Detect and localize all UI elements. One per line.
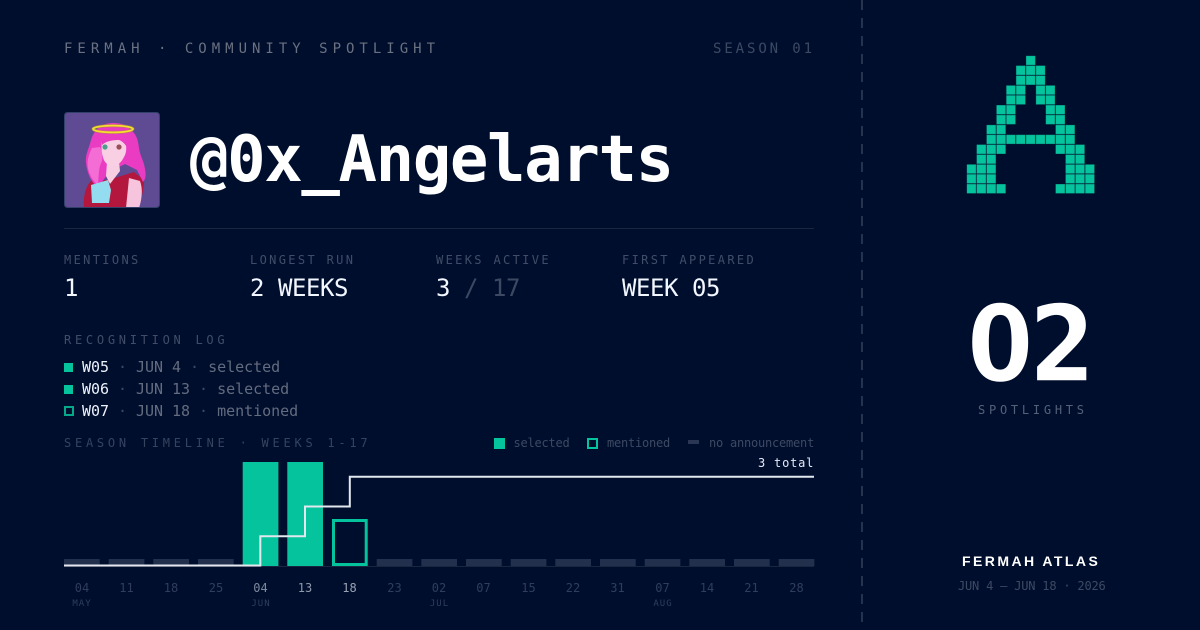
date axis labels: 18 (164, 581, 178, 595)
date axis labels: 25 (209, 581, 223, 595)
recognition log (64, 333, 298, 420)
log row W05: W05 · JUN 4 · selected (82, 358, 280, 376)
date axis labels: MAY (72, 599, 92, 609)
legend: selected (514, 436, 570, 450)
legend: no announcement (709, 436, 814, 450)
title: handle: @0x_Angelarts (190, 123, 673, 197)
log row W06: W06 · JUN 13 · selected (82, 380, 289, 398)
date axis labels: 28 (789, 581, 804, 595)
legend: mentioned (607, 436, 670, 450)
big number: spotlight count: 02 (967, 282, 1091, 406)
stat: weeks active: WEEKS ACTIVE (436, 253, 551, 267)
date axis labels: JUL (430, 599, 449, 609)
cumulative step line (64, 477, 814, 566)
date axis labels: 18 (342, 581, 357, 595)
header: community spotlight: FERMAH · COMMUNITY SPOTLIGHT (64, 41, 440, 57)
date axis labels: 14 (700, 581, 714, 595)
date axis labels: 04 (75, 581, 89, 595)
date axis labels: 04 (253, 581, 268, 595)
stat: longest run: LONGEST RUN (250, 253, 355, 267)
date axis labels (72, 581, 804, 609)
stat: weeks active: 3 / 17 (436, 274, 520, 302)
logo: pixel letter A (967, 56, 1094, 193)
date axis labels: 11 (119, 581, 134, 595)
spotlights caption: SPOTLIGHTS (978, 403, 1088, 417)
date axis labels: JUN (251, 599, 271, 609)
stat: weeks active (436, 253, 551, 302)
date axis labels: 22 (566, 581, 580, 595)
date axis labels: AUG (653, 599, 673, 609)
date axis labels: 07 (655, 581, 670, 595)
date axis labels: 31 (610, 581, 625, 595)
stat: first appeared: WEEK 05 (622, 274, 720, 302)
date axis labels: 21 (744, 581, 759, 595)
stat: first appeared: FIRST APPEARED (622, 253, 756, 267)
stat: longest run: 2 WEEKS (250, 274, 348, 302)
timeline heading: SEASON TIMELINE · WEEKS 1-17 (64, 436, 371, 450)
date axis labels: 23 (387, 581, 402, 595)
stat: mentions: MENTIONS (64, 253, 141, 267)
stat: mentions: 1 (64, 274, 78, 302)
date axis labels: 07 (476, 581, 491, 595)
date axis labels: 02 (432, 581, 446, 595)
header: season label: SEASON 01 (713, 41, 815, 57)
stat: mentions (64, 253, 141, 302)
total label: 3 total (758, 456, 814, 470)
log row W07: W07 · JUN 18 · mentioned (82, 402, 298, 420)
stat: first appeared (622, 253, 756, 302)
avatar (64, 112, 160, 208)
date axis labels: 13 (298, 581, 312, 595)
date range: JUN 4 — JUN 18 · 2026 (958, 579, 1106, 593)
legend (494, 436, 814, 450)
bar chart: season timeline (64, 456, 814, 566)
log heading: RECOGNITION LOG (64, 333, 228, 347)
brand name: FERMAH ATLAS (962, 553, 1100, 569)
date axis labels: 15 (521, 581, 536, 595)
stat: longest run (250, 253, 355, 302)
